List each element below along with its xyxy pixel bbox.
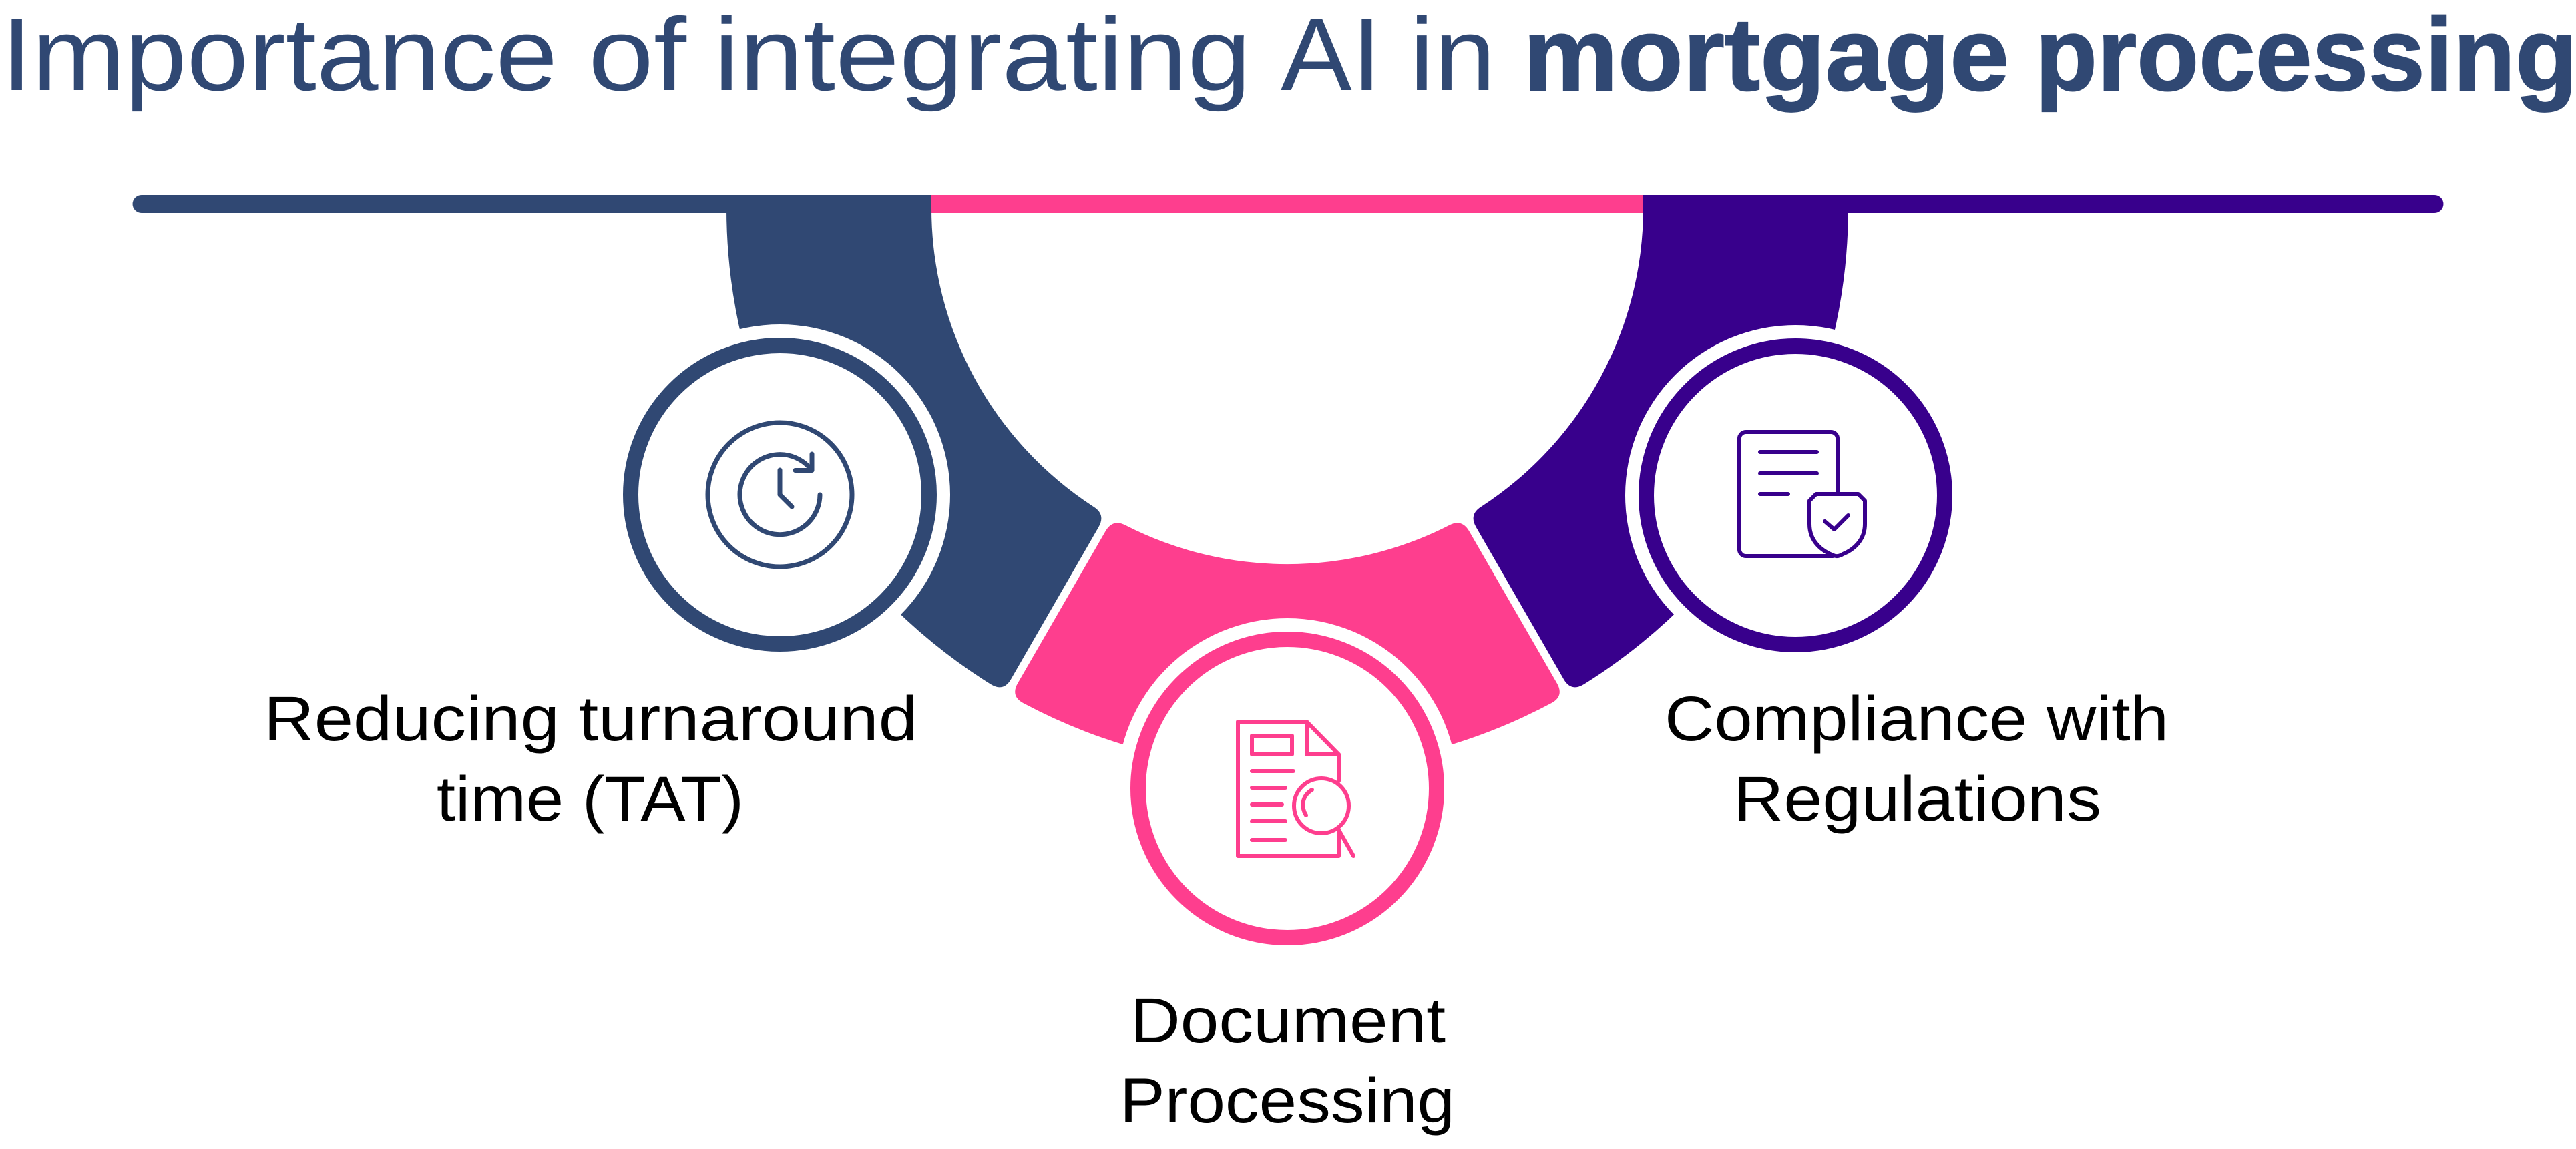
label: Reducing turnaround time (TAT): Reducing turnaround bbox=[264, 684, 917, 754]
label: Document Processing bbox=[1120, 985, 1455, 1136]
label: Reducing turnaround time (TAT) bbox=[264, 684, 917, 835]
title: integrating bbox=[714, 0, 1251, 112]
circle: pink badge bbox=[1117, 618, 1458, 959]
title bbox=[1, 0, 2576, 112]
title: of bbox=[588, 0, 687, 112]
title: AI bbox=[1281, 0, 1381, 112]
arc segment: navy bbox=[726, 200, 1101, 687]
top bar: purple section bbox=[1643, 195, 2444, 213]
title: in bbox=[1410, 0, 1496, 112]
icon: clock with clockwise arrow bbox=[708, 423, 852, 567]
arc segment: purple bbox=[1474, 200, 1848, 687]
label: Document Processing: Processing bbox=[1120, 1066, 1455, 1136]
arc segment: pink bbox=[1015, 523, 1560, 769]
label: Compliance with Regulations bbox=[1665, 684, 2169, 835]
icon: document with magnifier bbox=[1238, 722, 1353, 856]
label: Document Processing: Document bbox=[1130, 985, 1446, 1056]
icon: document with shield check bbox=[1739, 432, 1865, 556]
label: Compliance with Regulations: Compliance with bbox=[1665, 684, 2169, 754]
label: Compliance with Regulations: Regulations bbox=[1733, 764, 2101, 835]
title: mortgage bbox=[1523, 0, 2009, 112]
title: Importance bbox=[1, 0, 558, 112]
circle: navy badge bbox=[610, 324, 950, 665]
circle: purple badge bbox=[1625, 325, 1966, 666]
label: Reducing turnaround time (TAT): time (TAT) bbox=[437, 764, 744, 835]
top bar: navy section bbox=[132, 195, 931, 213]
top bar: pink section bbox=[931, 195, 1643, 213]
